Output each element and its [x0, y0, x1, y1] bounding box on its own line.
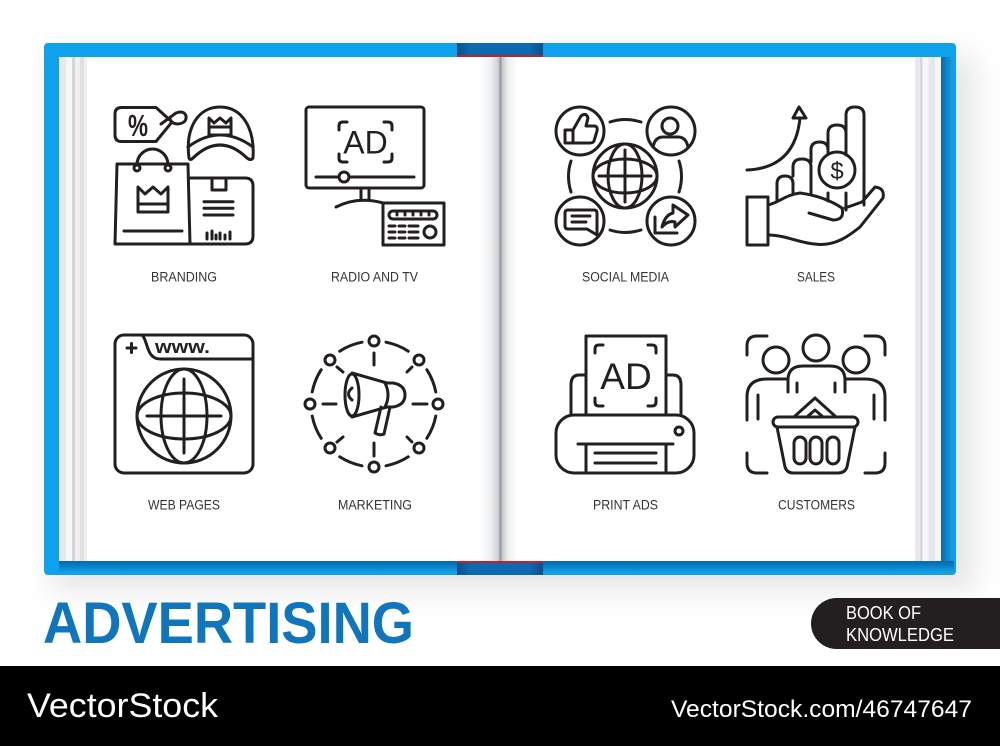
label: radio and tv: RADIO AND TV — [331, 270, 418, 284]
footer bar — [0, 666, 1000, 746]
icon: customers — [747, 335, 885, 473]
like circle — [556, 107, 604, 155]
megaphone — [345, 373, 405, 435]
label: customers: CUSTOMERS — [778, 498, 855, 512]
label: social media: SOCIAL MEDIA — [582, 270, 669, 284]
browser window: www. — [154, 337, 210, 357]
icon: print ads — [556, 336, 694, 473]
paper: AD — [600, 356, 652, 397]
footer url text: VectorStock.com/46747647 — [671, 696, 972, 723]
globe — [137, 369, 231, 463]
badge: book of knowledge: KNOWLEDGE — [846, 625, 954, 645]
label: web pages: WEB PAGES — [148, 498, 220, 512]
book shadow — [52, 56, 974, 590]
spine top band — [457, 43, 543, 57]
icon: social media — [556, 107, 695, 245]
left page edges — [59, 57, 87, 561]
spine bottom band — [457, 561, 543, 575]
globe — [593, 144, 657, 208]
right page edges — [915, 57, 941, 561]
book — [44, 43, 974, 590]
cap — [188, 107, 253, 160]
gutter shadow — [480, 57, 518, 561]
shopping bag — [115, 149, 190, 244]
pages — [59, 57, 941, 561]
price tag: % — [128, 108, 148, 143]
network ring — [305, 336, 443, 472]
profile circle — [647, 107, 695, 155]
bar fingers — [777, 107, 864, 210]
chat circle — [556, 197, 604, 245]
basket — [773, 398, 858, 473]
printer — [556, 375, 694, 473]
coin: $ — [830, 158, 844, 185]
share circle — [647, 197, 695, 245]
label: branding: BRANDING — [151, 270, 217, 284]
radio — [383, 203, 444, 245]
frame corners — [747, 336, 885, 473]
icon: marketing — [305, 336, 443, 472]
title: ADVERTISING — [43, 591, 414, 656]
icon: branding — [115, 107, 253, 244]
growth arrow — [747, 107, 806, 170]
icon: web pages — [115, 335, 253, 473]
hand — [747, 187, 883, 245]
badge: book of knowledge: BOOK OF — [846, 603, 921, 623]
label: marketing: MARKETING — [338, 498, 412, 512]
connecting arcs — [568, 120, 682, 232]
footer logo text: VectorStock — [27, 687, 219, 725]
icon: sales — [747, 107, 883, 245]
monitor: AD — [343, 124, 388, 160]
box — [189, 178, 253, 244]
book cover — [44, 43, 956, 575]
label: sales: SALES — [797, 270, 835, 284]
label: print ads: PRINT ADS — [593, 498, 658, 512]
people — [747, 335, 885, 420]
icon: radio and tv — [306, 107, 444, 245]
badge: book of knowledge — [811, 598, 1000, 649]
